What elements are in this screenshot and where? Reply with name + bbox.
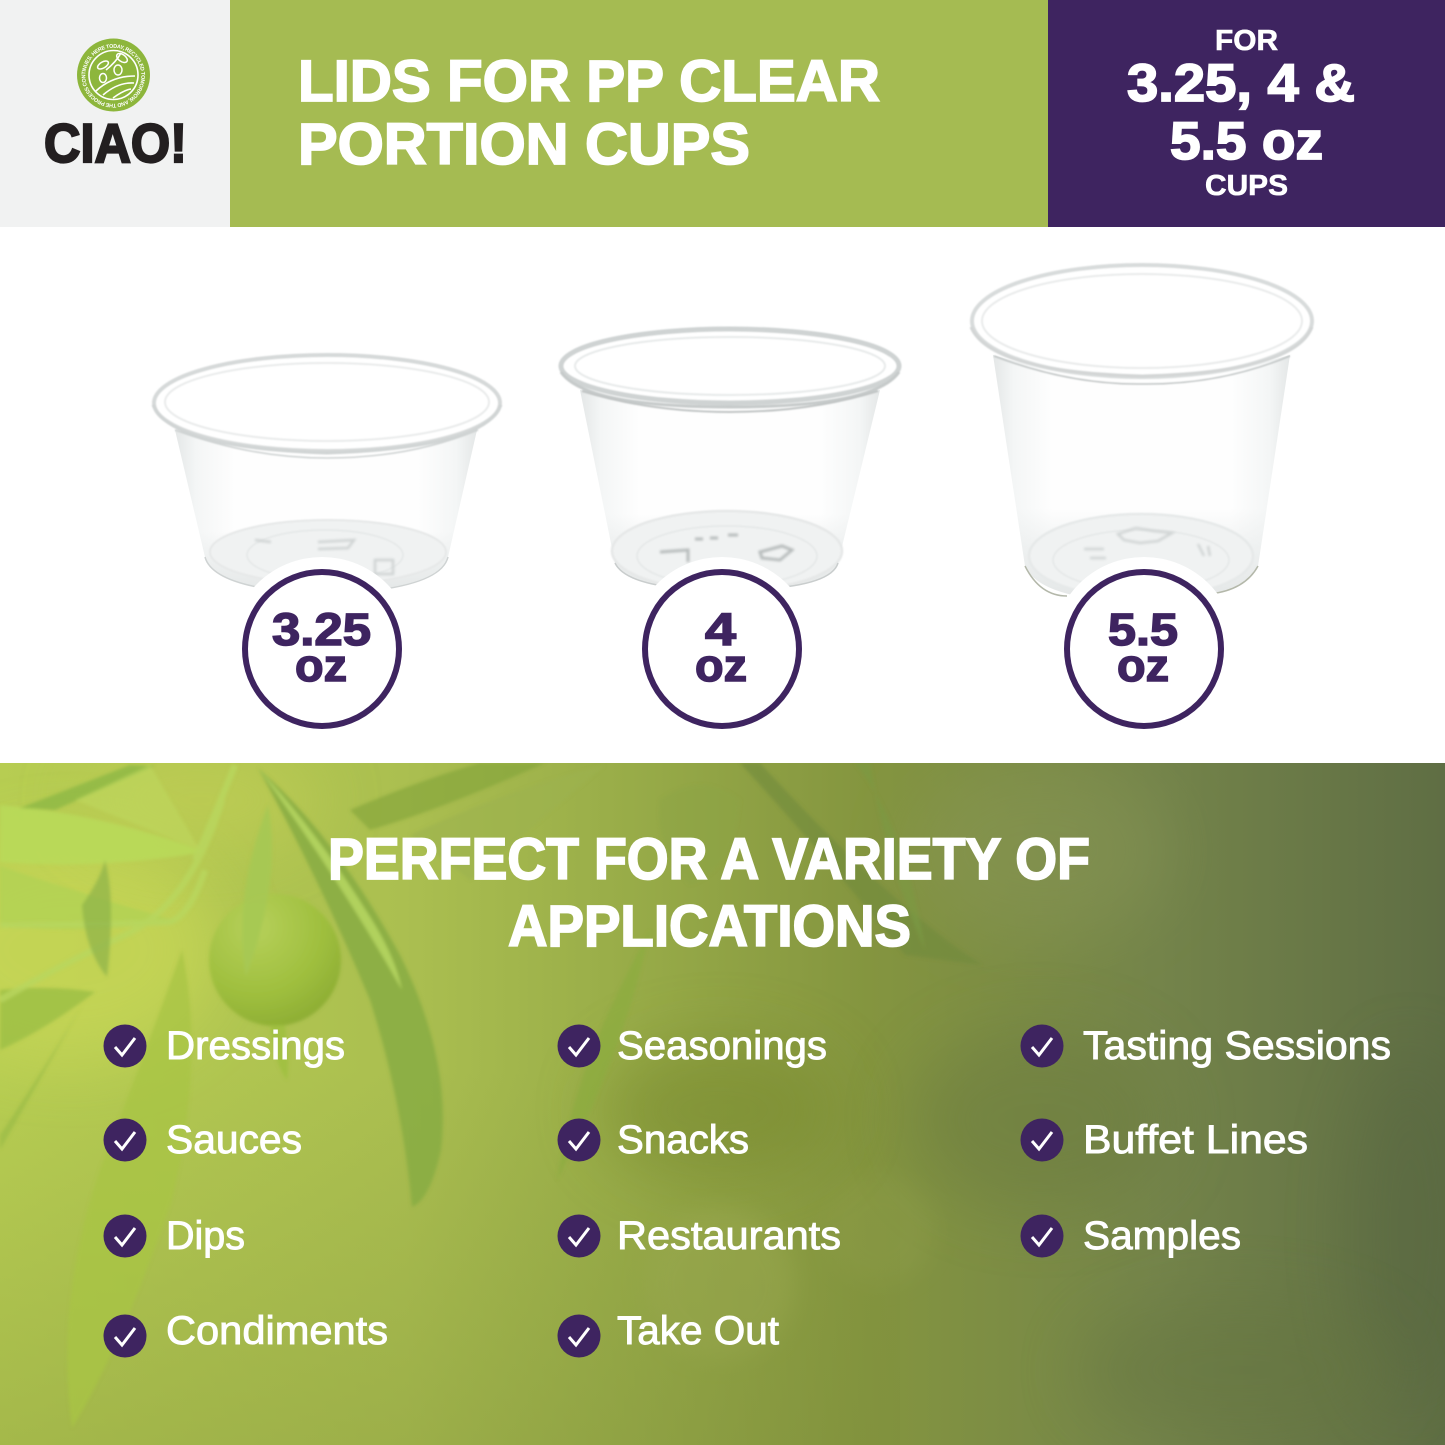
item: Snacks: Snacks bbox=[617, 1118, 749, 1162]
badge: 4 oz: 4 bbox=[705, 604, 736, 655]
item: Samples: Samples bbox=[1083, 1214, 1241, 1258]
item: Snacks bbox=[558, 1118, 749, 1162]
title panel bbox=[230, 0, 1048, 227]
item: Take Out: Take Out bbox=[617, 1309, 779, 1353]
panel background: olive branch photo bbox=[0, 750, 1445, 1445]
title bbox=[298, 49, 880, 177]
badge: 5.5 oz: oz bbox=[1117, 640, 1169, 691]
item: Tasting Sessions: Tasting Sessions bbox=[1083, 1024, 1391, 1068]
item: Condiments bbox=[104, 1309, 388, 1358]
badge: 5.5 oz bbox=[1052, 557, 1236, 741]
list column 1 bbox=[104, 1024, 388, 1358]
item: Dressings: Dressings bbox=[166, 1024, 345, 1068]
item: Buffet Lines: Buffet Lines bbox=[1083, 1118, 1308, 1162]
applications panel bbox=[0, 750, 1445, 1445]
badge: 3.25 oz: oz bbox=[295, 640, 347, 691]
size callout panel bbox=[1048, 0, 1445, 227]
cup: 5.5 oz bbox=[971, 265, 1312, 602]
list column 2 bbox=[558, 1024, 841, 1358]
size callout text bbox=[1127, 25, 1355, 202]
item: Sauces bbox=[104, 1118, 302, 1162]
section heading: APPLICATIONS bbox=[508, 894, 911, 959]
title: LIDS FOR PP CLEAR bbox=[298, 49, 880, 114]
item: Dips: Dips bbox=[166, 1214, 245, 1258]
size callout text: FOR bbox=[1215, 25, 1278, 57]
icon: round olive recycling seal: HERE TODAY, RECYCLED TOMORROW, AND THE PROCESS CONTINUES. bbox=[82, 44, 146, 108]
badge: 5.5 oz: 5.5 bbox=[1108, 604, 1178, 655]
logo wordmark: CIAO! bbox=[44, 112, 187, 174]
badge: 3.25 oz bbox=[230, 557, 414, 741]
cup: 3.25 oz bbox=[153, 355, 501, 594]
logo panel bbox=[0, 0, 230, 227]
cup: 4 oz bbox=[561, 329, 899, 591]
product row: three cups bbox=[153, 265, 1312, 741]
section heading: PERFECT FOR A VARIETY OF bbox=[328, 827, 1090, 892]
size callout text: 5.5 oz bbox=[1170, 112, 1323, 171]
badge: 4 oz bbox=[630, 557, 814, 741]
size callout text: CUPS bbox=[1205, 170, 1288, 202]
item: Condiments: Condiments bbox=[166, 1309, 388, 1353]
size callout text: 3.25, 4 & bbox=[1127, 54, 1355, 113]
item: Sauces: Sauces bbox=[166, 1118, 302, 1162]
item: Restaurants: Restaurants bbox=[617, 1214, 841, 1258]
item: Dips bbox=[104, 1214, 245, 1258]
header band bbox=[0, 0, 1445, 227]
item: Seasonings: Seasonings bbox=[617, 1024, 827, 1068]
section heading bbox=[328, 827, 1090, 959]
item: Take Out bbox=[558, 1309, 779, 1358]
badge: 4 oz: oz bbox=[695, 640, 747, 691]
list column 3 bbox=[1020, 1024, 1391, 1258]
title: PORTION CUPS bbox=[298, 112, 750, 177]
badge: 3.25 oz: 3.25 bbox=[272, 604, 371, 655]
